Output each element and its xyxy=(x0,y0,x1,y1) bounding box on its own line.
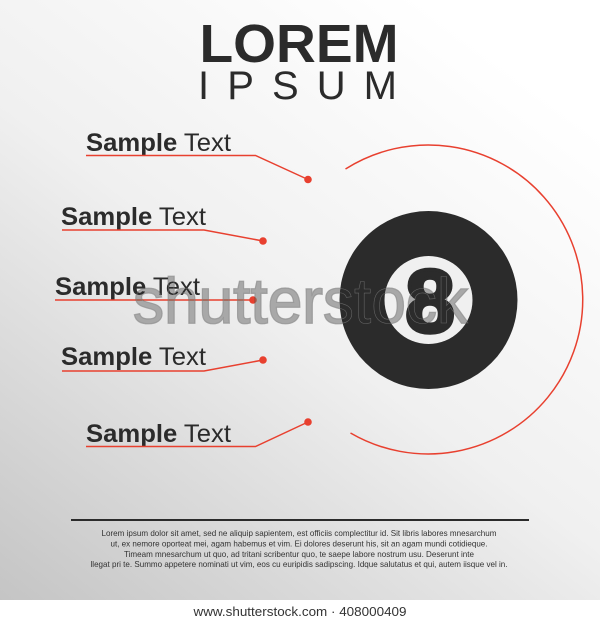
label 4: Sample Text xyxy=(61,343,206,371)
label 3: Sample Text xyxy=(55,273,200,301)
title: LOREM xyxy=(200,14,398,74)
body text xyxy=(90,528,508,569)
label 3 xyxy=(55,273,257,304)
title: IPSUM xyxy=(198,64,397,108)
label 5: Sample Text xyxy=(86,420,231,448)
body text: Lorem ipsum dolor sit amet, sed ne aliquip sapientem, est officiis complectitur id. Sit libris labores mnesarchum xyxy=(102,528,496,538)
divider xyxy=(71,519,529,521)
icon: eight ball xyxy=(340,211,518,389)
label 2: Sample Text xyxy=(61,203,206,231)
label 1 xyxy=(86,129,312,183)
watermark: shutterstock xyxy=(133,265,469,337)
body text: Timeam mnesarchum ut quo, ad tritani scribentur quo, te saepe labore nostrum usu. Deserunt inte xyxy=(124,549,474,559)
body text: llegat pri te. Summo appetere nominati ut vim, eos cu euripidis sadipscing. Idque salutatus et qui, autem iisque vel in. xyxy=(90,559,508,569)
label 2 xyxy=(61,203,267,245)
icon: eight ball: 8 xyxy=(405,252,455,352)
label 1: Sample Text xyxy=(86,129,231,157)
label 5 xyxy=(86,418,312,448)
footer url: www.shutterstock.com · 408000409 xyxy=(192,604,406,619)
watermark: shutterstock xyxy=(133,265,469,337)
body text: ut, ex nemore oporteat mei, agam habemus et vim. Ei dolores deserunt his, sit an agam mundi cotidieque. xyxy=(110,538,488,548)
title xyxy=(198,14,398,108)
label 4 xyxy=(61,343,267,371)
arc around ball xyxy=(346,145,583,454)
